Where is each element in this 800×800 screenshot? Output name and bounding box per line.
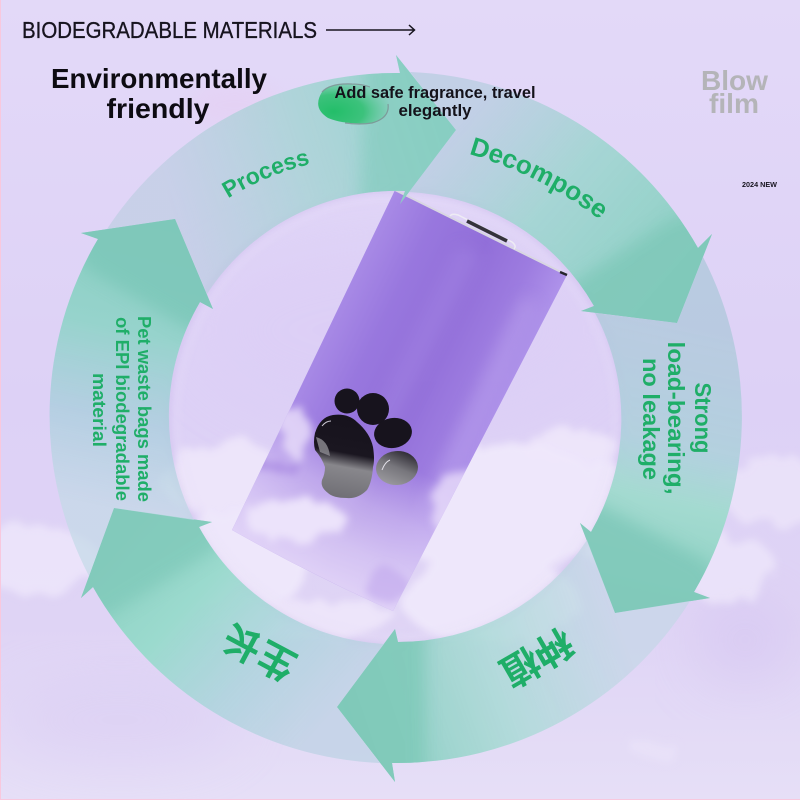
label: Decompose: Decompose [470, 137, 605, 218]
arrow: growth [81, 508, 384, 763]
label: Strong load-bearing, no leakage: no leakage [638, 358, 664, 480]
label: Strong load-bearing, no leakage: load-bearing, [663, 342, 689, 494]
title: Environmentally friendly: friendly [106, 93, 210, 124]
tag: 2024 NEW: 2024 NEW [742, 182, 777, 189]
product: purple bag roll cylinder [232, 191, 568, 611]
arrow: process [107, 55, 456, 294]
label: Pet waste bags made of EPI biodegradable material [89, 316, 155, 502]
watermark: Blow film: film [709, 88, 759, 119]
heading: biodegradable materials with arrow: BIODEGRADABLE MATERIALS [22, 17, 317, 43]
arrow: decompose [410, 72, 712, 323]
label: Process: Process [221, 153, 309, 198]
label: Strong load-bearing, no leakage [638, 342, 716, 494]
label: 生长: 生长 [217, 614, 304, 687]
icon: green pebble [318, 84, 389, 124]
callout: Add safe fragrance, travel elegantly [334, 83, 536, 120]
label: 种植: 种植 [493, 619, 579, 694]
watermark: Blow film: Blow [701, 65, 768, 96]
title: Environmentally friendly: Environmentally [51, 63, 268, 94]
title: Environmentally friendly [51, 63, 268, 124]
label: Pet waste bags made of EPI biodegradable material: of EPI biodegradable [112, 317, 133, 501]
icon: black paw print [314, 388, 419, 498]
label: Pet waste bags made of EPI biodegradable material: material [89, 373, 110, 447]
inner disc glow of the ring [168, 190, 624, 646]
arrow: heading pointer [326, 25, 414, 35]
arrow: pet waste bags [50, 219, 213, 576]
callout: Add safe fragrance, travel elegantly: Add safe fragrance, travel [334, 83, 536, 102]
callout: Add safe fragrance, travel elegantly: elegantly [398, 101, 472, 120]
arrow: planting [337, 540, 690, 782]
watermark: Blow film [701, 65, 768, 119]
label: Pet waste bags made of EPI biodegradable material: Pet waste bags made [134, 316, 155, 502]
label: Strong load-bearing, no leakage: Strong [690, 382, 716, 454]
rim: silver top edge with slot [395, 190, 567, 275]
arrow: strong [580, 257, 742, 613]
